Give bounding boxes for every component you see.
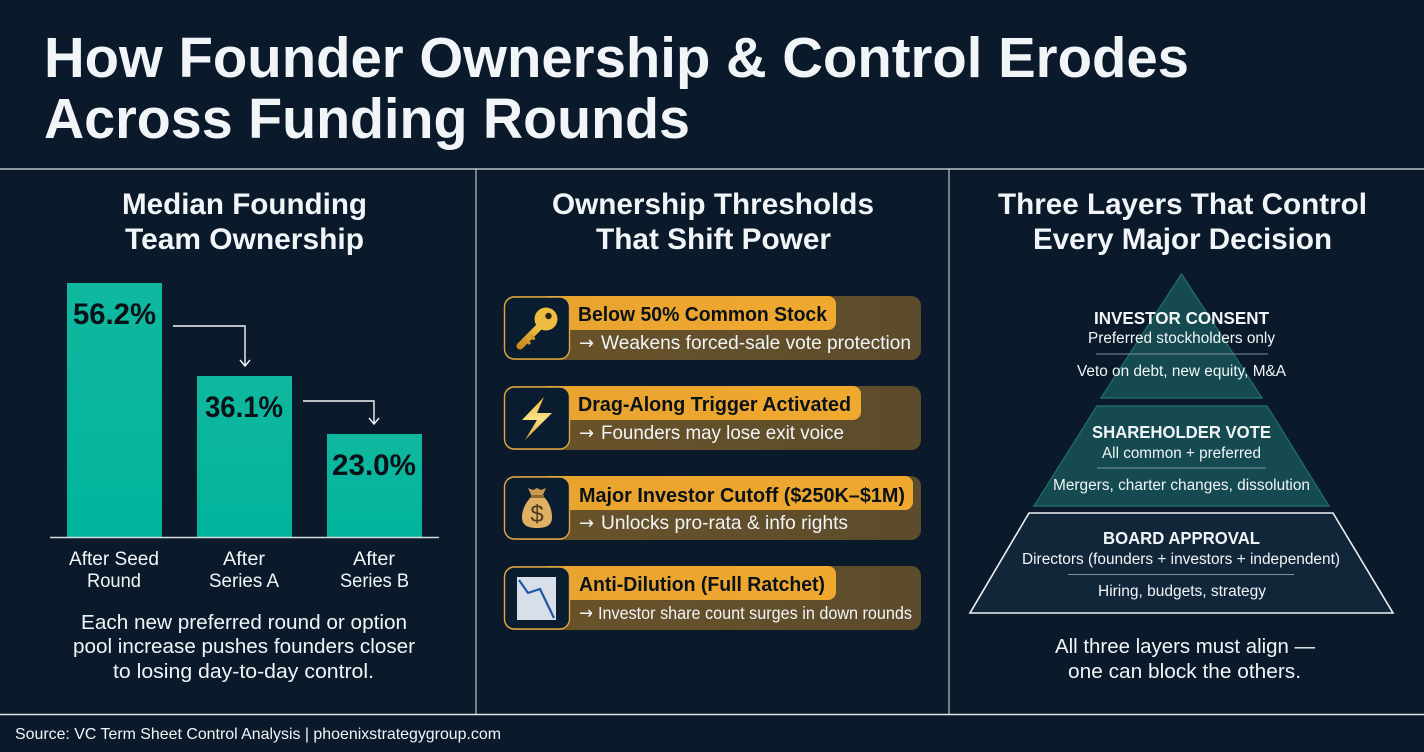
axis labels: After [353,549,396,570]
card: drag-along trigger activated: Founders may lose exit voice [601,422,844,444]
card: anti-dilution full ratchet: Investor share count surges in down rounds [598,603,912,623]
card: drag-along trigger activated: → [579,423,594,444]
heading: three layers [998,188,1367,256]
arrow: seed to series A [173,326,250,366]
icon: falling chart [504,567,570,629]
card: major investor cutoff: → [579,513,594,534]
heading: ownership thresholds: That Shift Power [596,223,832,256]
card: major investor cutoff: Unlocks pro-rata & info rights [601,512,848,534]
tier: board approval [970,513,1393,613]
pyramid [970,274,1393,613]
caption: dilution note [73,612,415,683]
tier: shareholder vote: SHAREHOLDER VOTE [1092,422,1271,442]
axis labels: Series B [340,571,409,592]
title: How Founder Ownership & Control Erodes [44,26,1189,90]
card: anti-dilution full ratchet: → [579,603,593,624]
source footer: Source: VC Term Sheet Control Analysis | phoenixstrategygroup.com [15,726,501,743]
heading: median founding team ownership: Median Founding [122,188,367,221]
heading: median founding team ownership [122,188,367,256]
caption: dilution note: to losing day-to-day control. [113,661,374,683]
heading: median founding team ownership: Team Ownership [125,223,364,256]
bar: after series A 36.1% [197,376,292,537]
tier: board approval: BOARD APPROVAL [1103,528,1260,548]
bar chart [50,283,439,592]
tier: shareholder vote: All common + preferred [1102,445,1261,462]
heading: three layers: Every Major Decision [1033,223,1332,256]
tier: board approval: Directors (founders + investors + independent) [1022,551,1340,568]
tier: shareholder vote: Mergers, charter changes, dissolution [1053,477,1310,494]
bar: after seed round 56.2% [67,283,162,537]
caption: dilution note: Each new preferred round or option [81,612,407,634]
axis labels [69,549,409,592]
title [44,26,1189,151]
title: Across Funding Rounds [44,87,690,151]
tier: investor consent [1077,274,1287,398]
heading: ownership thresholds: Ownership Thresholds [552,188,874,221]
axis labels: After Seed [69,549,159,570]
icon: lightning bolt [504,387,570,449]
card: below 50% common stock: → [579,333,594,354]
heading: three layers: Three Layers That Control [998,188,1367,221]
panel: three layers of control [970,188,1393,683]
bar: after series B 23.0%: 23.0% [332,449,416,482]
tier: board approval: Hiring, budgets, strategy [1098,583,1266,600]
card: below 50% common stock: Weakens forced-sale vote protection [601,332,911,354]
panel: median founding team ownership [50,188,439,683]
caption: dilution note: pool increase pushes founders closer [73,636,415,658]
bar: after series B 23.0% [327,434,422,537]
heading: ownership thresholds [552,188,874,256]
card: drag-along trigger activated [504,386,921,450]
tier: investor consent: Preferred stockholders only [1088,330,1275,347]
tier: shareholder vote [1034,406,1329,506]
caption: alignment note [1055,636,1315,683]
card: drag-along trigger activated: Drag-Along Trigger Activated [578,394,851,416]
icon: key [504,297,570,359]
card: major investor cutoff [504,476,921,540]
caption: alignment note: one can block the others. [1068,661,1301,683]
panel: ownership thresholds [504,188,921,630]
card: major investor cutoff: Major Investor Cutoff ($250K–$1M) [579,485,905,507]
tier: investor consent: INVESTOR CONSENT [1094,308,1269,328]
icon: money bag: $ [530,501,544,528]
axis labels: Series A [209,571,279,592]
arrow: series A to series B [303,401,379,424]
card: anti-dilution full ratchet: Anti-Dilution (Full Ratchet) [579,574,825,596]
card: below 50% common stock [504,296,921,360]
tier: investor consent: Veto on debt, new equity, M&A [1077,363,1287,380]
axis labels: After [223,549,266,570]
bar: after seed round 56.2%: 56.2% [73,298,156,331]
icon: money bag [504,477,570,539]
bar: after series A 36.1%: 36.1% [205,391,283,424]
caption: alignment note: All three layers must align — [1055,636,1315,658]
card: anti-dilution full ratchet [504,566,921,630]
axis labels: Round [87,571,141,592]
card: below 50% common stock: Below 50% Common Stock [578,304,828,326]
